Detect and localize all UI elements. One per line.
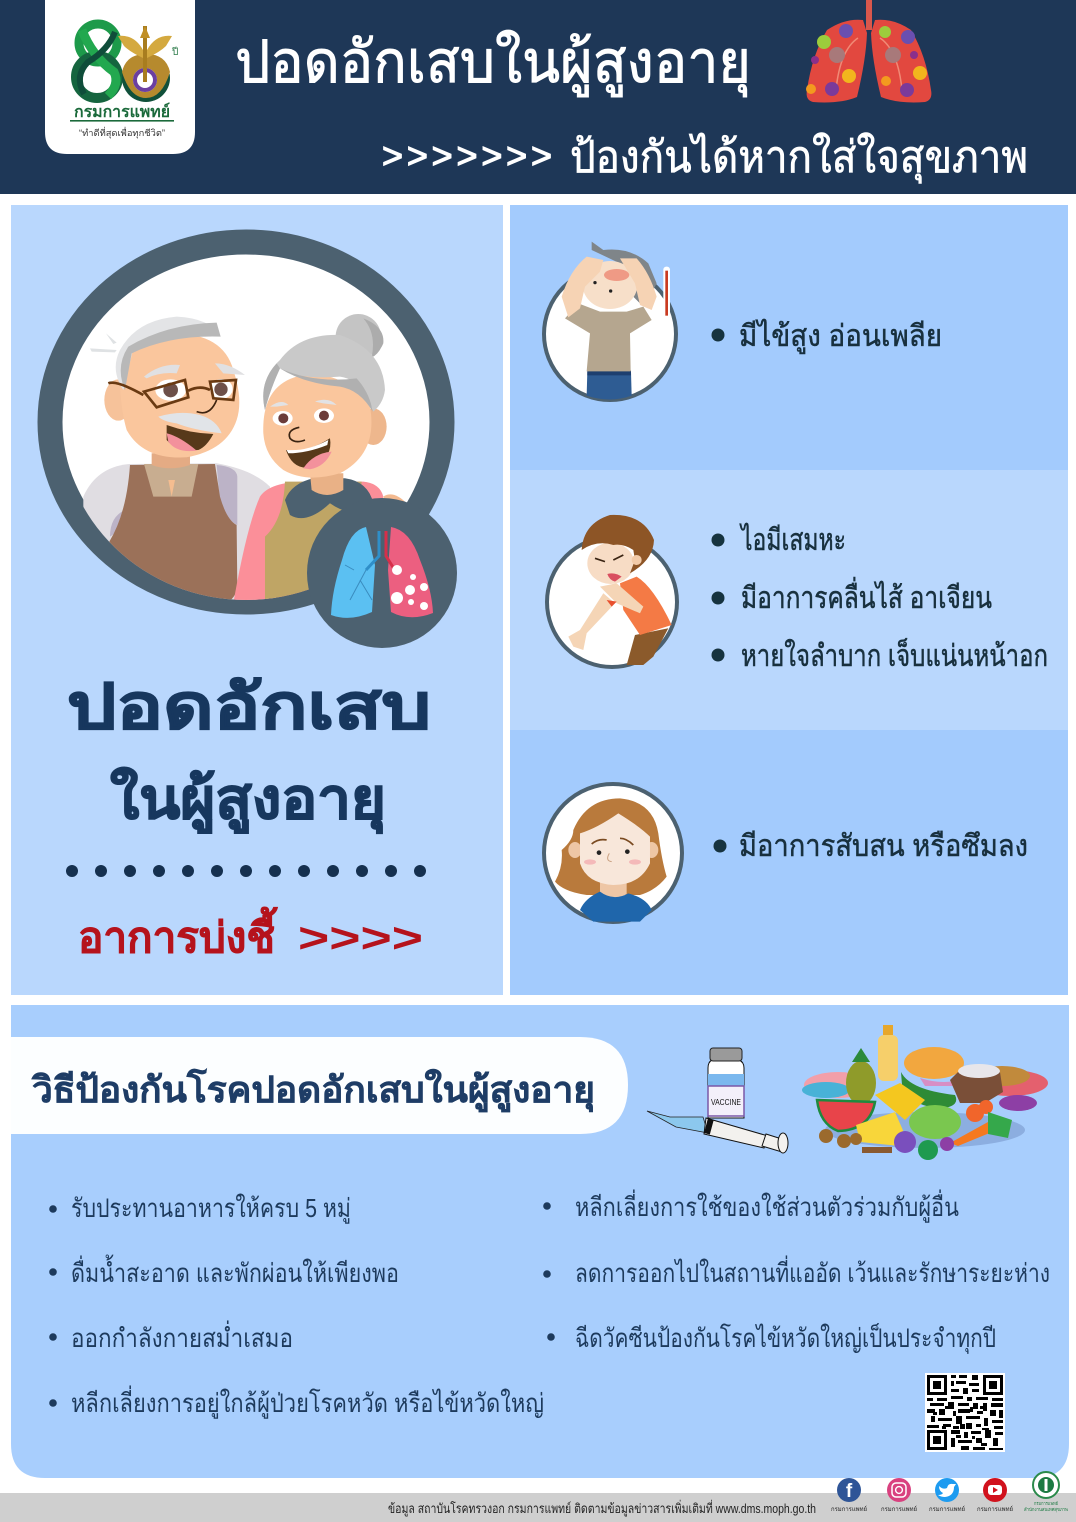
icon: ministry emblem: กรมการแพทย์ <box>1034 1500 1058 1506</box>
main title: ปอดอักเสบในผู้สูงอายุ <box>235 29 751 98</box>
logo caduceus emblem <box>118 26 178 102</box>
footer bar <box>0 1472 1076 1522</box>
icon: facebook <box>831 1478 867 1513</box>
subtitle <box>382 132 1028 184</box>
icon: facebook: f <box>846 1481 853 1502</box>
icon: man with fever <box>544 242 676 400</box>
icon: facebook: กรมการแพทย์ <box>831 1505 867 1513</box>
heading: in the elderly: ในผู้สูงอายุ <box>110 766 386 834</box>
icon: infected lungs <box>806 0 931 102</box>
logo card <box>45 0 195 154</box>
tip: balanced diet: รับประทานอาหารให้ครบ 5 หมู่ <box>71 1193 351 1224</box>
logo caduceus emblem: ปี <box>171 46 178 58</box>
heading: pneumonia: ปอดอักเสบ <box>67 673 431 742</box>
source credit: ข้อมูล สถาบันโรคทรวงอก กรมการแพทย์ ติดตามข้อมูลข่าวสารเพิ่มเติมที่ www.dms.moph.go.th <box>388 1500 816 1517</box>
heading: warning signs: อาการบ่งชี้ <box>78 906 279 961</box>
prevention list: right column <box>543 1189 1050 1354</box>
icon: vaccine and syringe <box>647 1048 788 1153</box>
symptom bullet <box>712 648 724 662</box>
subtitle: >>>>>>> <box>382 135 552 176</box>
icon: instagram <box>881 1478 917 1513</box>
woman body <box>233 473 407 603</box>
panel: fever symptom <box>510 205 1068 470</box>
logo numeral eight <box>76 24 118 98</box>
tip: avoid sick people: หลีกเลี่ยงการอยู่ใกล้ผู้ป่วยโรคหวัด หรือไข้หวัดใหญ่ <box>71 1385 544 1419</box>
panel: confusion symptom <box>510 730 1068 995</box>
illustration: elderly couple <box>50 242 442 607</box>
symptom bullet <box>712 592 724 604</box>
symptom text: ไอมีเสมหะ <box>739 522 846 557</box>
tip: water and rest: ดื่มน้ำสะอาด และพักผ่อนให้เพียงพอ <box>71 1254 399 1288</box>
header banner <box>0 0 1076 194</box>
heading: warning signs: >>>> <box>298 914 423 961</box>
logo name: กรมการแพทย์ <box>74 102 170 121</box>
symptom text: มีอาการสับสน หรือซึมลง <box>739 830 1028 863</box>
tip: personal items: หลีกเลี่ยงการใช้ของใช้ส่วนตัวร่วมกับผู้อื่น <box>575 1189 959 1223</box>
icon: youtube <box>977 1478 1013 1513</box>
woman head <box>263 314 387 478</box>
icon: instagram: กรมการแพทย์ <box>881 1505 917 1513</box>
panel: respiratory symptoms <box>510 470 1068 730</box>
heading: prevention <box>11 1037 628 1134</box>
dotted separator <box>66 865 426 877</box>
subtitle: ป้องกันได้หากใส่ใจสุขภาพ <box>570 132 1028 184</box>
icon: healthy food group <box>802 1025 1048 1160</box>
prevention list: left column <box>49 1193 544 1419</box>
symptom bullet <box>712 328 724 342</box>
symptom bullet <box>712 534 724 546</box>
man head <box>90 317 245 458</box>
man body <box>83 453 277 607</box>
heading: warning signs <box>78 906 423 961</box>
QR code <box>925 1373 1005 1452</box>
tip: exercise: ออกกำลังกายสม่ำเสมอ <box>71 1320 293 1353</box>
heading: prevention: วิธีป้องกันโรคปอดอักเสบในผู้สูงอายุ <box>31 1068 595 1113</box>
icon: twitter <box>929 1478 965 1513</box>
icon: coughing boy <box>547 515 677 667</box>
icon: twitter: กรมการแพทย์ <box>929 1505 965 1513</box>
symptom text: มีอาการคลื่นไส้ อาเจียน <box>741 577 992 615</box>
icon: youtube: กรมการแพทย์ <box>977 1505 1013 1513</box>
symptom text: มีไข้สูง อ่อนเพลีย <box>739 318 942 354</box>
icon: lungs badge <box>307 498 457 648</box>
logo slogan: “ทำดีที่สุดเพื่อทุกชีวิต” <box>79 126 165 139</box>
icon: woman looking unwell <box>544 784 682 922</box>
symptom bullet <box>714 840 726 852</box>
icon: ministry emblem: สำนักงานสนเทศสุขภาพ <box>1024 1506 1068 1513</box>
icon: ministry emblem <box>1024 1472 1068 1513</box>
panel: prevention <box>11 1005 1069 1478</box>
panel: pneumonia in elderly <box>11 205 503 995</box>
icon: vaccine and syringe: VACCINE <box>711 1098 741 1107</box>
